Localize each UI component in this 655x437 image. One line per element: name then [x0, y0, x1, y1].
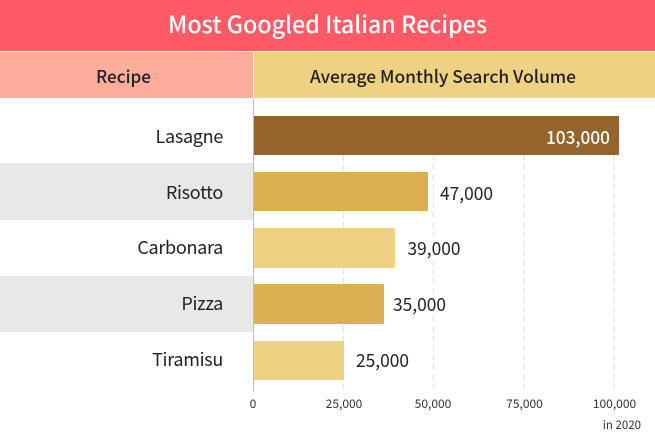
- x axis labels: 50,000: [415, 395, 452, 412]
- x axis labels: 0: [250, 395, 257, 412]
- recipe labels: Lasagne: [156, 123, 223, 149]
- header: recipe column: Recipe: [96, 64, 151, 89]
- bar: Lasagne: [254, 116, 619, 155]
- x axis labels: 100,000: [593, 395, 636, 412]
- header: search volume column: [254, 52, 655, 98]
- recipe labels: Risotto: [166, 179, 223, 205]
- x axis labels: 25,000: [326, 395, 363, 412]
- bar: Carbonara: 39,000: [408, 235, 460, 261]
- recipe labels: Tiramisu: [152, 346, 223, 372]
- bar: Risotto: [254, 172, 493, 211]
- recipe labels: Carbonara: [137, 234, 223, 260]
- header: recipe column: [0, 52, 253, 98]
- bar: Pizza: 35,000: [393, 291, 446, 317]
- footnote: year: in 2020: [603, 417, 641, 433]
- bar: Tiramisu: 25,000: [356, 347, 409, 373]
- row bands: [0, 163, 253, 332]
- bar: Tiramisu: [254, 341, 409, 380]
- header: search volume column: Average Monthly Search Volume: [310, 64, 576, 89]
- bar: Pizza: [254, 284, 446, 324]
- title banner: [0, 0, 655, 51]
- recipe labels: [137, 123, 223, 372]
- bar: Carbonara: [254, 228, 460, 268]
- x axis labels: 75,000: [506, 395, 543, 412]
- bar: Lasagne: 103,000: [546, 124, 610, 150]
- bar chart: [254, 116, 619, 380]
- recipe labels: Pizza: [181, 290, 223, 316]
- bar: Risotto: 47,000: [440, 180, 493, 206]
- x axis labels: [250, 395, 636, 412]
- title banner: Most Googled Italian Recipes: [168, 6, 487, 40]
